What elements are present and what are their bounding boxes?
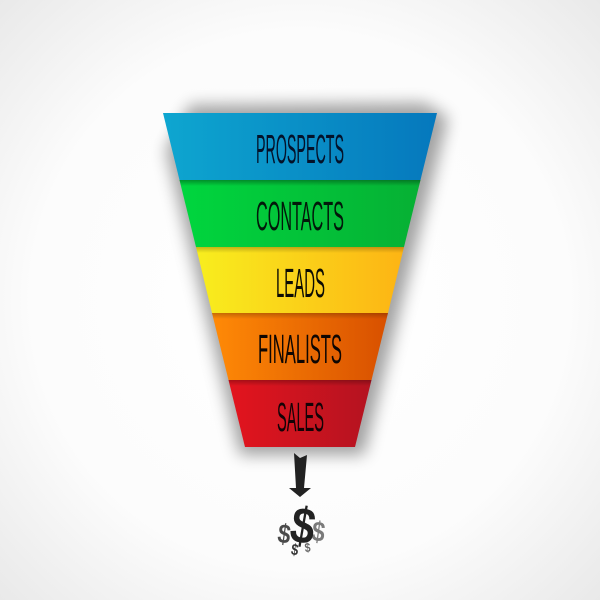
band: leads xyxy=(196,247,404,313)
band: sales: SALES xyxy=(277,394,324,440)
small gray dollar: $ xyxy=(304,541,312,556)
band: prospects: PROSPECTS xyxy=(256,126,344,172)
left dollar: $ xyxy=(276,519,293,550)
band: sales xyxy=(228,380,372,447)
large dollar: $ xyxy=(286,496,320,557)
funnel drop shadow xyxy=(166,103,448,455)
right dollar: $ xyxy=(310,514,328,548)
band: contacts xyxy=(180,180,420,247)
funnel xyxy=(163,113,437,447)
small dollar: $ xyxy=(290,541,299,560)
band: leads: LEADS xyxy=(276,260,325,306)
icon: dollar signs xyxy=(276,496,328,560)
arrow xyxy=(289,453,311,497)
band: contacts: CONTACTS xyxy=(256,193,344,239)
band: finalists: FINALISTS xyxy=(258,326,342,372)
band: finalists xyxy=(212,313,388,380)
band: prospects xyxy=(163,113,437,180)
